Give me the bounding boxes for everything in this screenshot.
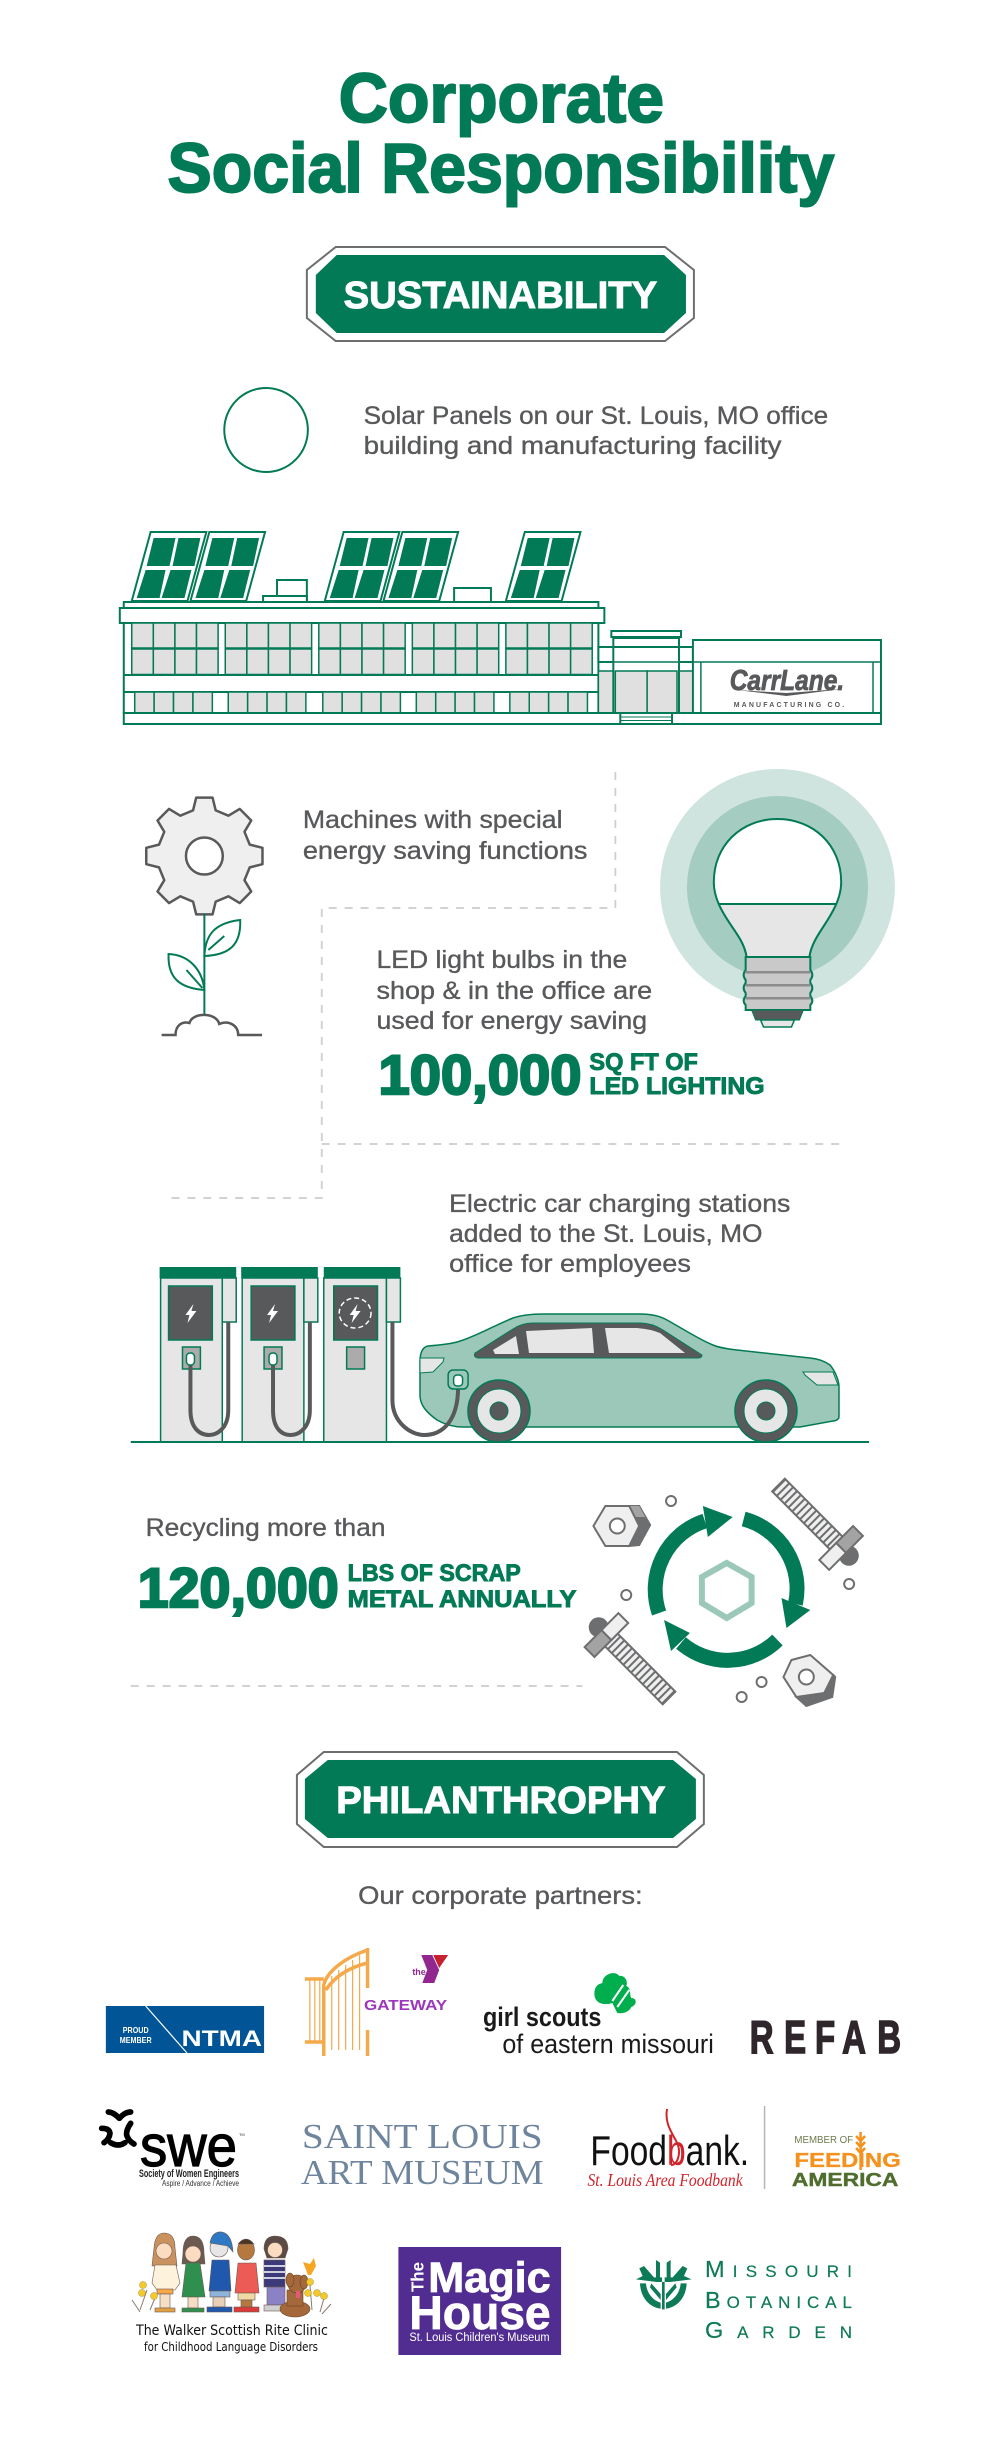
icon: Botanical Garden emblem [636,2260,692,2309]
logo: The Magic House [398,2247,561,2355]
title: Social Responsibility [168,129,834,207]
logo: Missouri Botanical Garden: B OTANICAL [705,2287,852,2313]
icon: empty circle [224,388,308,472]
stat: 120,000 lbs: LBS OF SCRAP [348,1560,521,1587]
text: LED bulbs: used for energy saving [377,1007,647,1035]
logo: Carr Lane: CarrLane. [730,665,844,697]
text: solar panels: building and manufacturing facility [364,432,782,460]
logo: Saint Louis Art Museum: SAINT LOUIS [302,2117,543,2156]
logo: Refab: REFAB [750,2013,901,2063]
logo: Feeding America: AMERICA [792,2169,898,2190]
stat: 100,000 sq ft: 100,000 [379,1043,581,1106]
logo: NTMA: PROUD [123,2025,149,2035]
child 2 [182,2236,205,2312]
stat: 100,000 sq ft: LED LIGHTING [589,1073,765,1100]
logo: St. Louis Area Foodbank: Foodbank. [590,2127,749,2174]
charger 2 [241,1267,318,1442]
solar panel array [132,532,580,601]
child 5 [264,2236,288,2311]
logo: NTMA: NTMA [181,2026,262,2051]
logo: Carr Lane: MANUFACTURING CO. [734,702,844,709]
logo: Feeding America [792,2132,901,2190]
logo: Walker Scottish Rite Clinic: The Walker Scottish Rite Clinic [135,2323,328,2339]
logo: Missouri Botanical Garden: M ISSOURI [705,2256,852,2282]
stat: 120,000 lbs: 120,000 [138,1556,339,1619]
bolt top right [762,1468,873,1580]
charger 1 [160,1267,236,1442]
text: solar panels: Solar Panels on our St. Louis, MO office [364,402,828,430]
dog [280,2273,310,2317]
text: LED bulbs: LED light bulbs in the [377,946,627,974]
text: charging stations: office for employees [449,1250,691,1278]
logo: Feeding America: MEMBER OF [794,2135,853,2146]
butterfly and flowers [132,2258,331,2314]
logo: girl scouts: of eastern missouri [502,2029,714,2059]
logo: The Magic House: Magic [428,2254,551,2302]
logo: Walker Scottish Rite Clinic: for Childhood Language Disorders [144,2340,318,2354]
text: charging stations: added to the St. Louis, MO [449,1220,763,1248]
text: charging stations [449,1190,790,1278]
text: corporate partners: Our corporate partners: [358,1882,643,1910]
logo: Carr Lane [730,665,844,709]
text: charging stations: Electric car charging stations [449,1190,790,1218]
dashed connector lines [131,772,840,1686]
bolt bottom left [575,1603,686,1715]
logo: Walker Scottish Rite Clinic [132,2232,331,2354]
text: solar panels [364,402,828,460]
nut bottom right [783,1655,835,1706]
text: machines [303,806,587,865]
stat: 100,000 sq ft: SQ FT OF [589,1049,698,1076]
logo: St. Louis Area Foodbank: St. Louis Area Foodbank [587,2170,744,2190]
text: LED bulbs [377,946,652,1035]
child 1 [152,2233,180,2312]
logo: NTMA: MEMBER [120,2035,152,2045]
logo: girl scouts: girl scouts [483,2002,601,2032]
divider [764,2106,766,2189]
icon: gear with plant [146,798,262,1035]
child 4 [234,2239,259,2312]
logo: The Magic House: The [407,2262,427,2292]
badge: sustainability [307,247,694,341]
logo: NTMA [106,2006,264,2053]
child 3 [207,2232,233,2312]
small rings [621,1496,854,1702]
logo: Feeding America: FEEDING [794,2150,901,2172]
icon: recycling ring with nuts and bolts [575,1468,873,1715]
badge: philanthropy: PHILANTHROPHY [336,1780,666,1822]
logo: Society of Women Engineers: swe [140,2115,237,2179]
logo: Missouri Botanical Garden: G ARDEN [705,2317,852,2343]
illustration: charging stations and car [131,1267,869,1442]
logo: Gateway YMCA: GATEWAY [364,1997,447,2014]
logo: Gateway YMCA: the [412,1967,426,1977]
logo: The Magic House: St. Louis Children's Museum [409,2330,550,2344]
logo: Society of Women Engineers [102,2112,245,2188]
logo: Saint Louis Art Museum [301,2117,544,2192]
text: machines: Machines with special [303,806,563,834]
title [168,59,834,207]
charger 3 [324,1267,400,1442]
children and dog illustration [152,2232,310,2317]
text: recycling: Recycling more than [146,1514,385,1542]
logo: Saint Louis Art Museum: ART MUSEUM [301,2153,544,2192]
logo: Missouri Botanical Garden [636,2256,852,2343]
logo: Society of Women Engineers: TM [239,2132,245,2137]
recycling arrows [655,1506,810,1660]
logo: Gateway YMCA [305,1948,448,2056]
nut top left [593,1506,650,1546]
car [420,1314,839,1442]
text: LED bulbs: shop & in the office are [377,977,652,1005]
logo: Society of Women Engineers: Society of Women Engineers [139,2168,239,2180]
charging cable and plug [392,1322,468,1435]
logo: Society of Women Engineers: Aspire / Advance / Achieve [162,2179,239,2188]
text: machines: energy saving functions [303,837,587,865]
badge: philanthropy [297,1752,704,1847]
icon: light bulb with halo [660,769,895,1027]
stat: 100,000 sq ft [378,1043,765,1106]
logo: girl scouts [483,1973,714,2059]
stat: 120,000 lbs [138,1556,577,1619]
icon: SWE gear [102,2112,134,2145]
illustration: building with solar panels [120,532,881,724]
badge: sustainability: SUSTAINABILITY [344,275,657,317]
logo: The Magic House: House [409,2287,551,2339]
stat: 120,000 lbs: METAL ANNUALLY [348,1586,577,1613]
logo: St. Louis Area Foodbank [587,2109,749,2190]
title: Corporate [339,59,664,137]
